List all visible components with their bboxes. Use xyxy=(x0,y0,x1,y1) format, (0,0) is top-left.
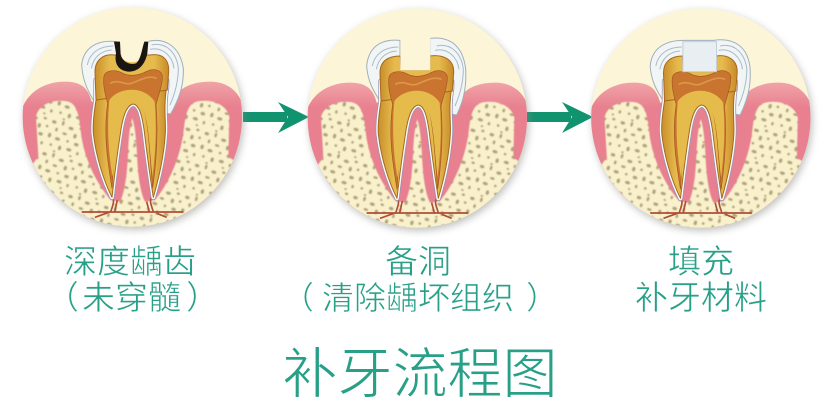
label: step 1: 深度龋齿 xyxy=(64,243,196,280)
label: step 2 note: ） xyxy=(526,280,558,316)
prepared cavity opening xyxy=(400,34,430,70)
panel: prepared cavity tooth xyxy=(305,8,530,241)
enamel with notch xyxy=(367,38,466,115)
label: step 3 note: 补牙材料 xyxy=(635,279,767,316)
cavity opening xyxy=(115,37,149,62)
label: step 2 note: 清除龋坏组织 xyxy=(322,280,514,316)
label: step 3: 填充 xyxy=(668,243,734,280)
label: step 1 note: （ xyxy=(46,279,79,316)
icon: black cavity xyxy=(114,42,148,72)
panel: deep caries tooth xyxy=(20,7,245,240)
enamel xyxy=(82,40,183,114)
label: step 1 note: ） xyxy=(186,279,219,316)
arrow: step 1 to step 2 xyxy=(243,102,309,133)
filling material xyxy=(683,42,716,72)
panel: filled tooth xyxy=(588,8,813,241)
label: step 2: 备洞 xyxy=(385,243,451,280)
label: step 2 note: （ xyxy=(282,280,314,316)
enamel xyxy=(650,40,750,115)
arrow: step 2 to step 3 xyxy=(527,102,593,133)
label: step 1 note: 未穿髓 xyxy=(82,279,181,316)
